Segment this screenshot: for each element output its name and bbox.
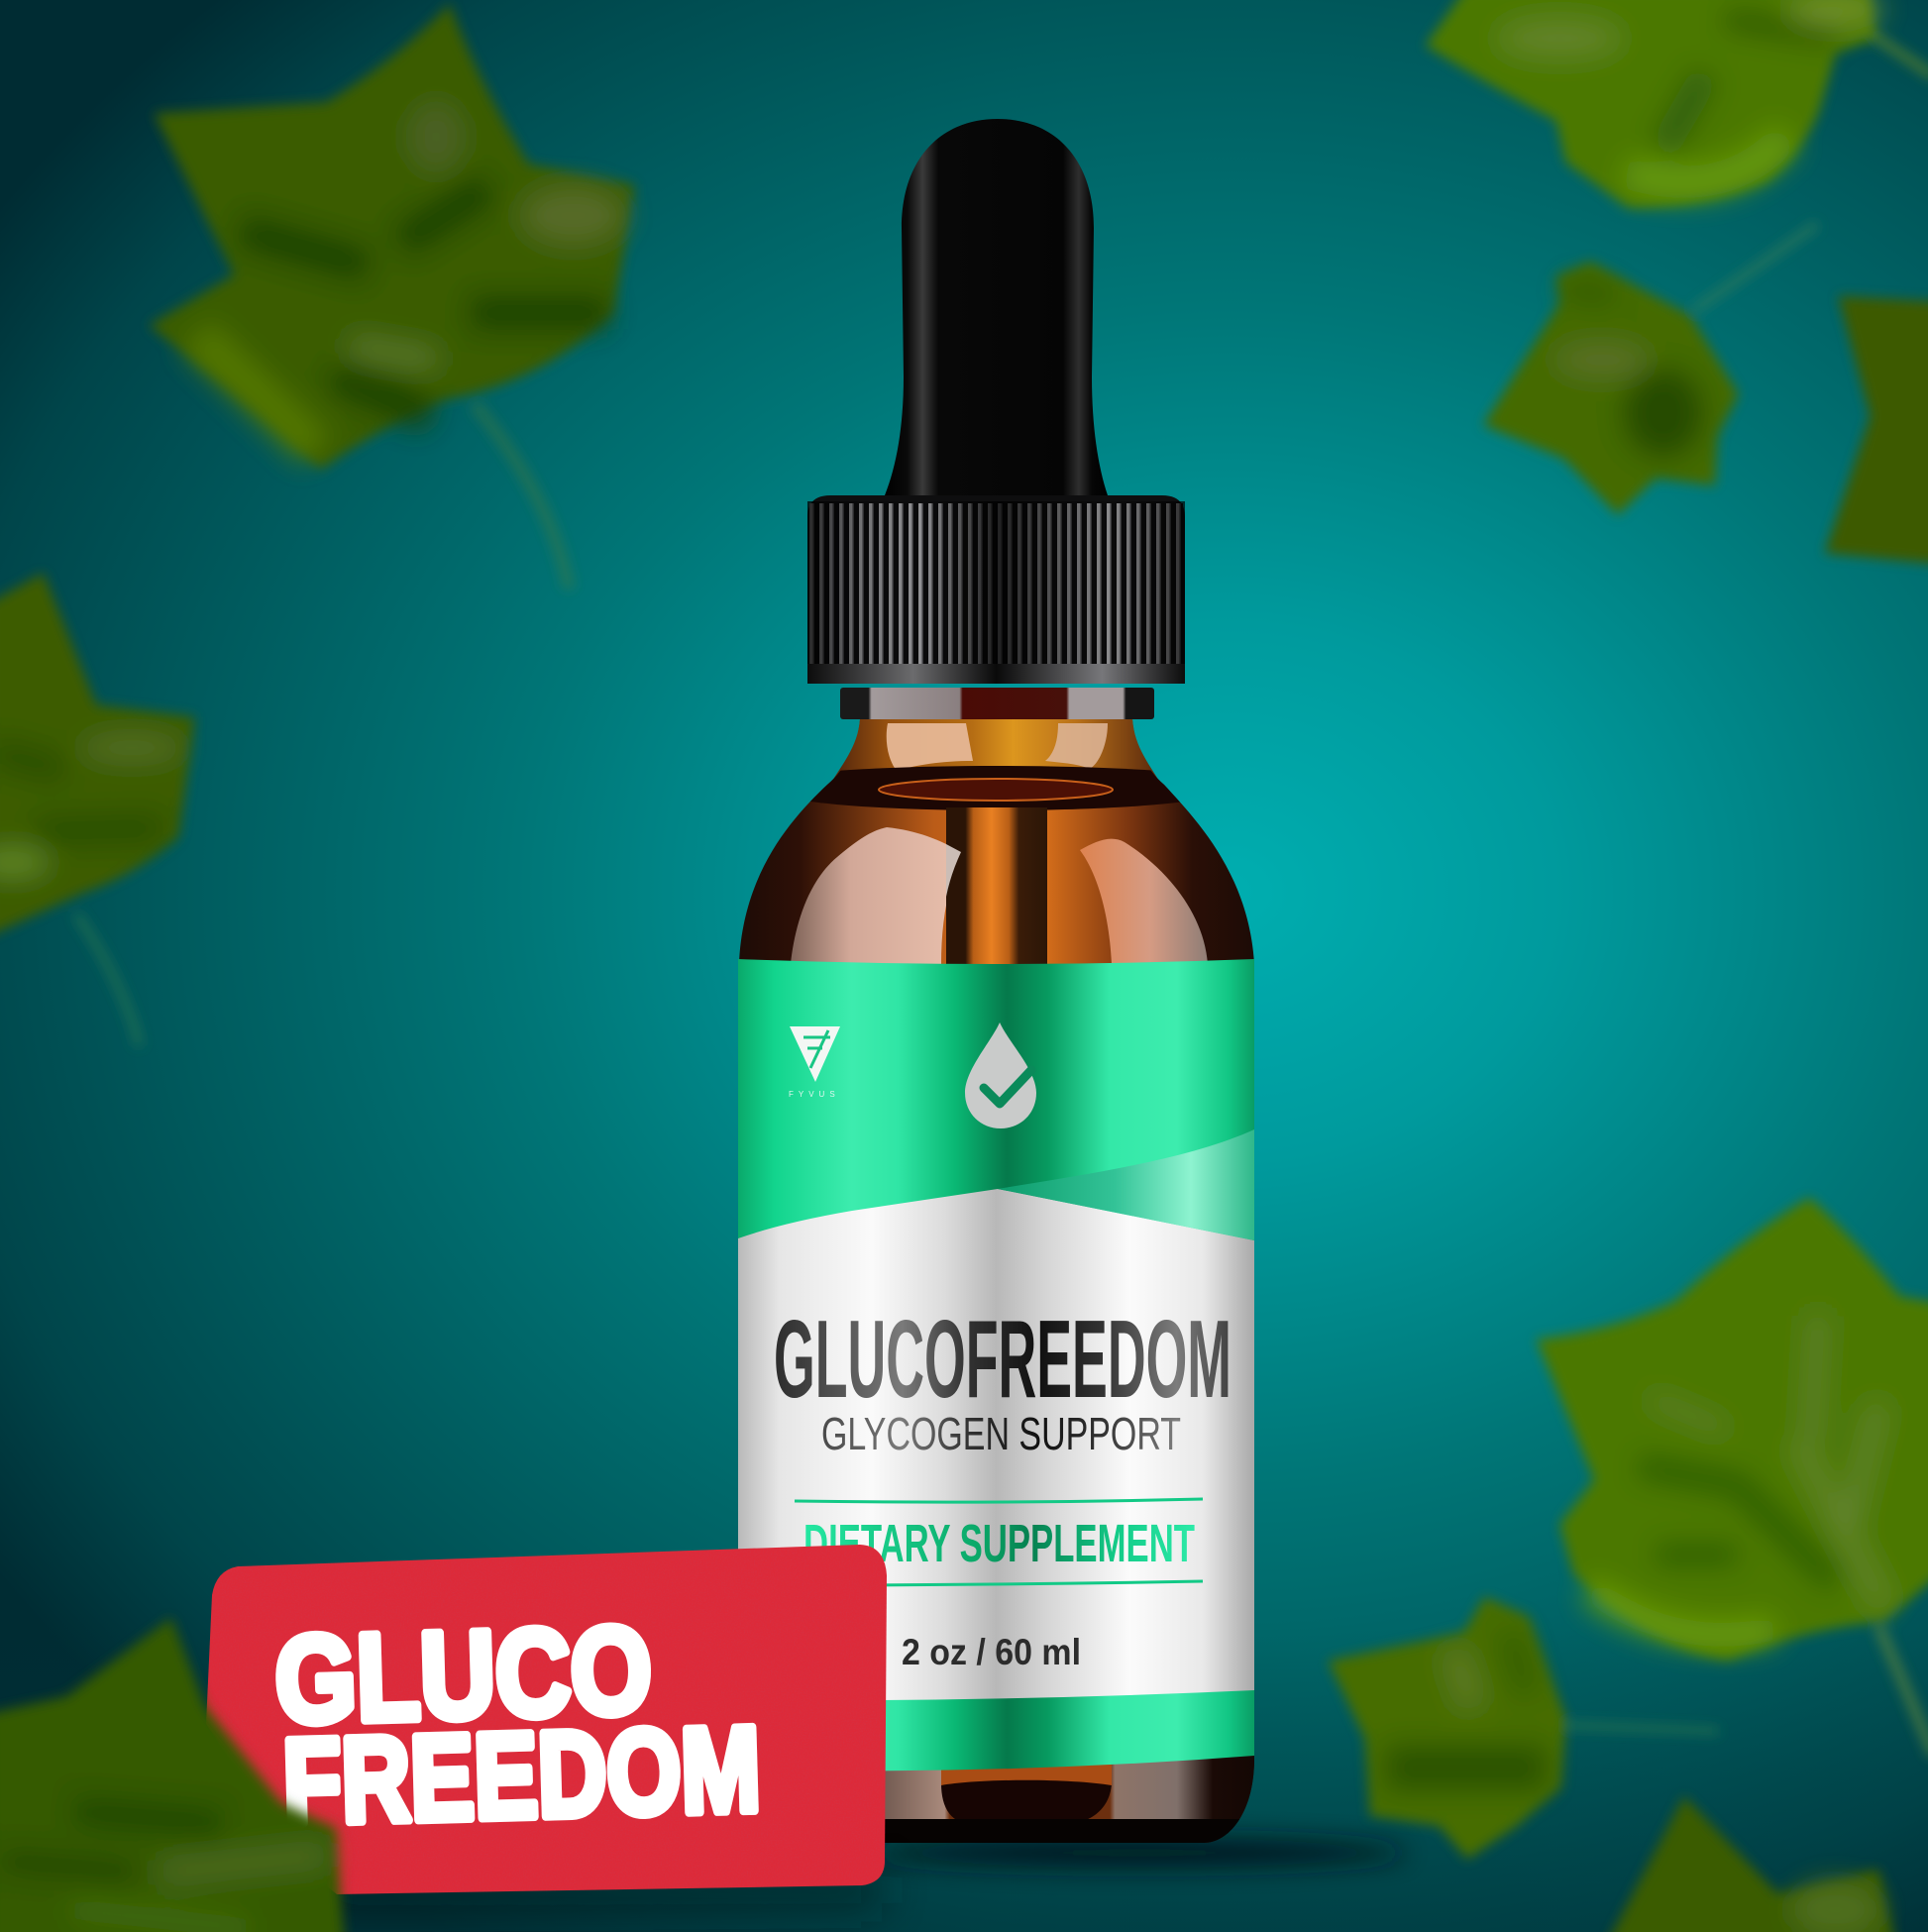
floor vignette	[0, 1625, 1928, 1932]
red card shadow	[228, 1873, 882, 1912]
product subtitle: GLYCOGEN SUPPORT	[821, 1408, 1181, 1459]
leaf: right middle	[1483, 224, 1817, 515]
leaf: lower middle	[1328, 1597, 1719, 1859]
drop and check icon	[965, 1022, 1036, 1128]
leaf: top left	[149, 4, 634, 589]
leaf: left	[0, 573, 194, 1046]
volume text: 2 oz / 60 ml	[902, 1632, 1081, 1672]
leaf: right edge	[1825, 295, 1928, 565]
tube glint	[946, 844, 961, 897]
leaf: bottom right	[1605, 1796, 1896, 1932]
bottle shadow	[872, 1838, 1407, 1868]
card title: FREEDOM	[281, 1701, 762, 1850]
right highlight	[1080, 839, 1208, 964]
label green bottom band	[738, 1690, 1254, 1771]
left highlight	[791, 827, 961, 964]
neck highlight right	[1045, 723, 1108, 769]
liquid meniscus	[879, 779, 1113, 801]
neck collar	[840, 688, 1154, 719]
dropper bottle	[738, 119, 1254, 1843]
rule bottom	[795, 1581, 1203, 1585]
glass body	[738, 719, 1254, 1843]
leaf: lower right large	[1537, 1198, 1928, 1756]
red product card	[206, 1545, 887, 1894]
base glass	[885, 1756, 1254, 1843]
label white panel	[738, 1179, 1254, 1700]
ribbed cap	[807, 495, 1185, 684]
foreground blurred leaf	[0, 1618, 345, 1932]
dietary supplement text: DIETARY SUPPLEMENT	[803, 1514, 1195, 1573]
dropper tube	[946, 807, 1047, 964]
leaf: top right	[1426, 0, 1928, 208]
bottle label: GLUCOFREEDOM	[774, 1298, 1232, 1421]
card title: GLUCO	[273, 1601, 654, 1750]
amber neck	[832, 719, 1159, 781]
liquid surface	[810, 766, 1180, 810]
rule top	[795, 1499, 1203, 1502]
label green top	[738, 959, 1254, 1240]
neck highlight left	[887, 723, 973, 771]
card texture	[206, 1545, 887, 1894]
card title	[273, 1598, 762, 1850]
bottle label	[738, 959, 1254, 1771]
brand logo: FYVUS	[789, 1090, 840, 1099]
label ribbon accent	[998, 1129, 1254, 1240]
rubber bulb	[885, 119, 1108, 495]
card shape	[206, 1545, 887, 1894]
brand logo	[789, 1026, 840, 1099]
